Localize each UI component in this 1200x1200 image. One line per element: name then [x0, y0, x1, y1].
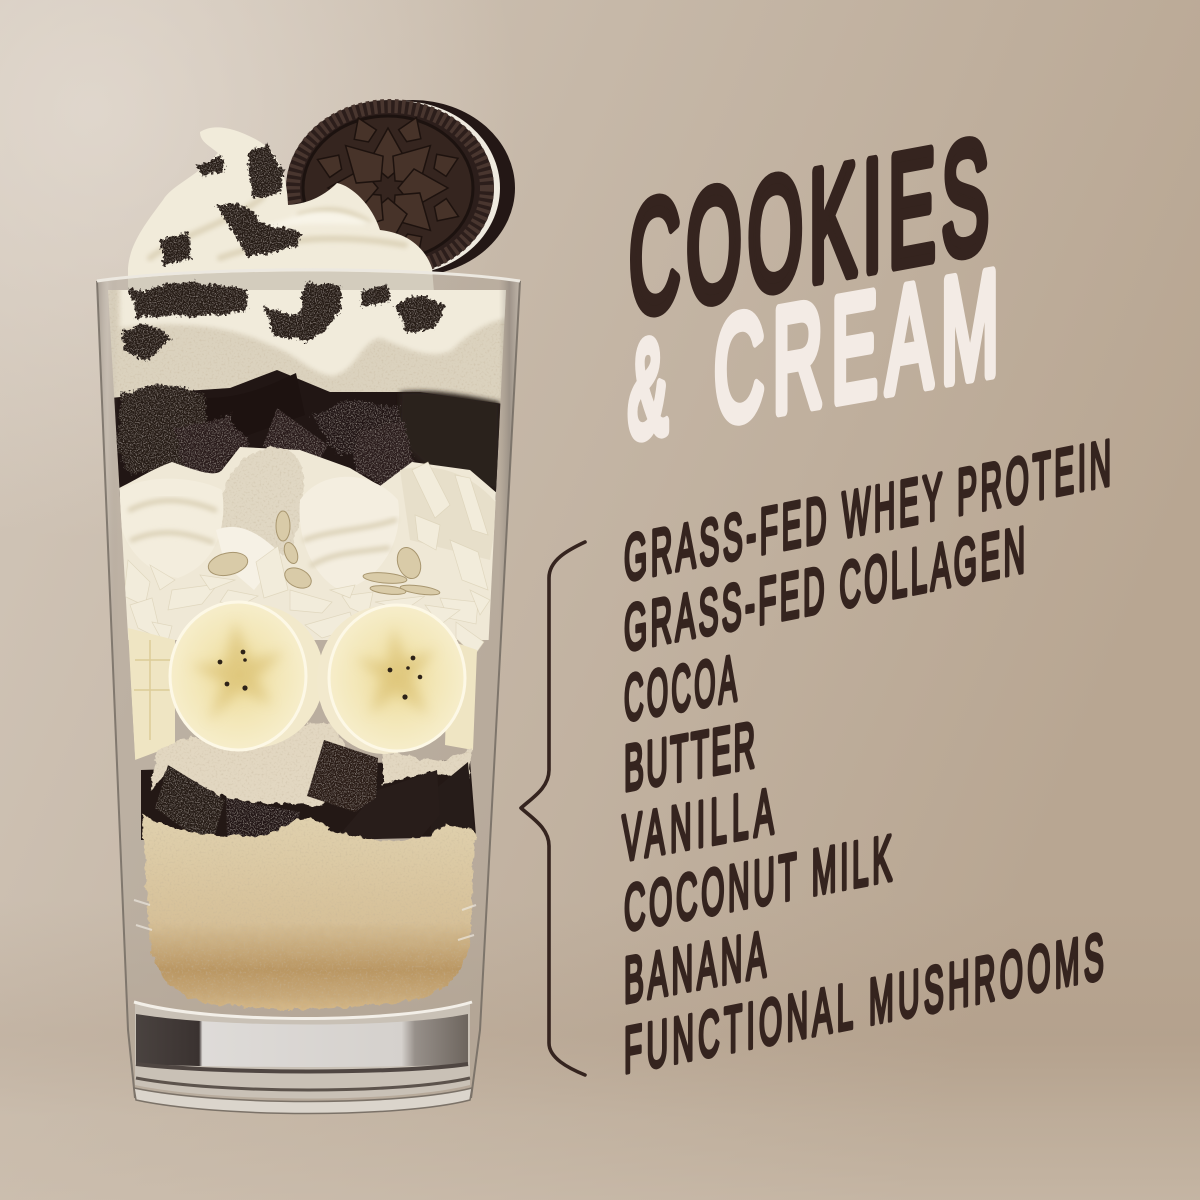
- ingredient: cocoa: COCOA: [624, 641, 737, 735]
- base powder layer: [142, 815, 475, 1009]
- title: and Cream: CREAM: [714, 239, 999, 455]
- whipped cream topping: [128, 127, 434, 292]
- banana slice right: [317, 605, 465, 754]
- powder scoop: [150, 722, 472, 806]
- banana slice left: [170, 595, 333, 757]
- ingredient: collagen: GRASS-FED COLLAGEN: [624, 513, 1025, 665]
- cookie crumbles on cream: [122, 145, 446, 360]
- ingredient: coconut milk: COCONUT MILK: [624, 821, 892, 945]
- glass interior back wall: [98, 272, 520, 1113]
- thick glass base: [134, 1002, 472, 1114]
- ingredient: functional mushrooms: FUNCTIONAL MUSHROOMS: [624, 919, 1104, 1087]
- title: and Cream: &: [628, 310, 668, 468]
- whipped cream and coconut layer: [115, 447, 505, 656]
- ingredient: whey protein: GRASS-FED WHEY PROTEIN: [624, 426, 1111, 595]
- chocolate chunks: [155, 740, 474, 842]
- ice cream layer: [108, 290, 506, 404]
- ingredient: butter: BUTTER: [624, 708, 755, 805]
- layers inside the glass: [100, 285, 510, 1009]
- icon: sandwich cookie: [286, 100, 515, 276]
- glass body and highlights: [97, 270, 520, 1098]
- crumble and chocolate layer: [110, 370, 510, 500]
- side banana pieces: [128, 628, 477, 760]
- glass of layered cookies and cream shake: [97, 100, 520, 1114]
- ingredient: banana: BANANA: [624, 917, 766, 1017]
- title: Cookies: COOKIES: [629, 107, 989, 350]
- ingredients list: [622, 426, 1111, 1087]
- bracket: [521, 542, 585, 1075]
- ingredient: vanilla: VANILLA: [622, 774, 774, 875]
- chocolate backdrop: [141, 760, 476, 840]
